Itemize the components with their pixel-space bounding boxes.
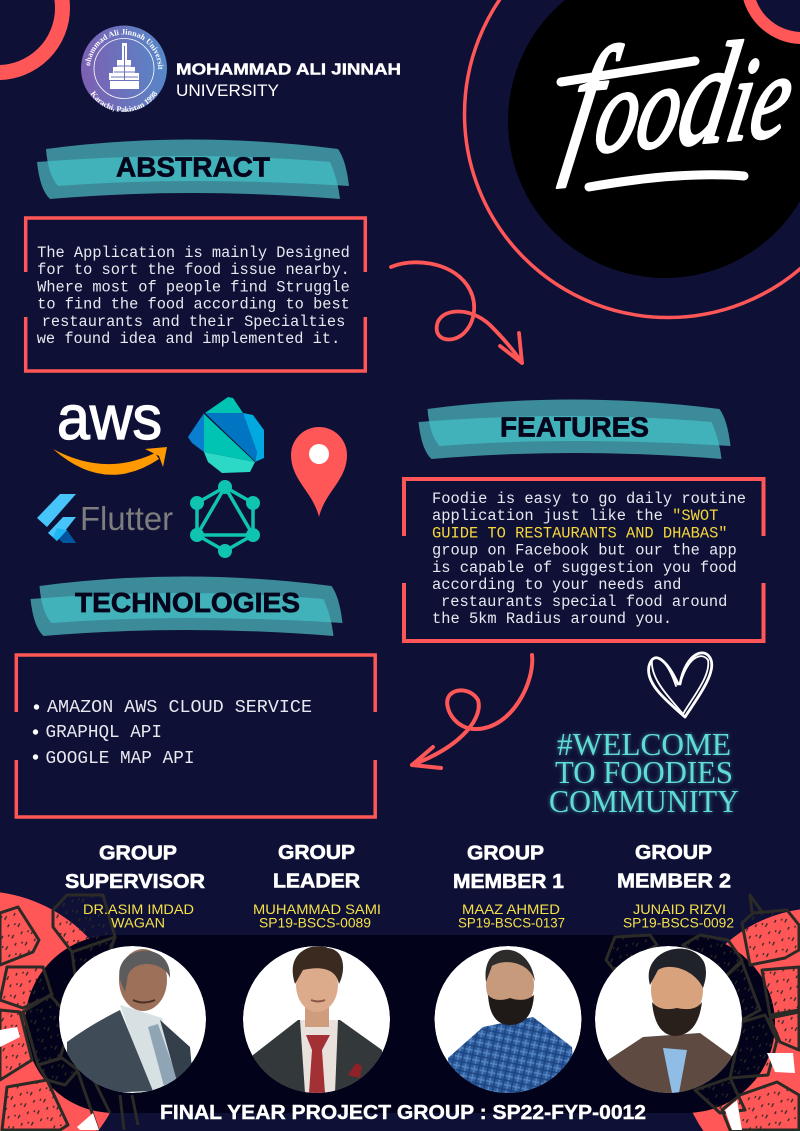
group member 1 heading and name: MEMBER 1	[453, 871, 564, 893]
panel: technologies: AMAZON AWS CLOUD SERVICE	[47, 698, 312, 718]
icon: map pin	[291, 427, 347, 517]
university seal: Karachi, Pakistan 1998	[90, 90, 158, 112]
group supervisor heading and name: DR.ASIM IMDAD	[83, 902, 194, 917]
panel: abstract: we found idea and implemented it.	[37, 330, 340, 348]
heading: features	[418, 400, 730, 459]
logo: flutter	[37, 494, 173, 543]
arrow: abstract to features	[391, 262, 522, 363]
decorative ring: top left	[0, 0, 62, 72]
group member 1 heading and name: SP19-BSCS-0137	[458, 916, 565, 930]
group member 2 heading and name: GROUP	[635, 842, 712, 864]
panel: features: application just like the "SWOT	[432, 507, 718, 525]
footer: project group: FINAL YEAR PROJECT GROUP : SP22-FYP-0012	[160, 1102, 646, 1124]
arrow: features to technologies	[412, 655, 532, 768]
panel: features: Foodie is easy to go daily routine	[432, 490, 746, 508]
slogan: welcome to foodies community: TO FOODIES	[555, 754, 733, 790]
team background: red circles and black band	[0, 892, 800, 1131]
group member 2 heading and name	[617, 842, 734, 930]
panel: abstract: Where most of people find Struggle	[37, 278, 350, 296]
illustration: right kebab skewer	[606, 895, 799, 1130]
panel: abstract: restaurants and their Specialties	[42, 313, 345, 331]
panel: abstract: for to sort the food issue nearby.	[37, 261, 350, 279]
group member 2 heading and name: SP19-BSCS-0092	[623, 916, 734, 930]
slogan: welcome to foodies community	[549, 726, 739, 819]
logo: aws: aws	[57, 384, 162, 453]
panel: abstract: The Application is mainly Designed	[37, 244, 350, 262]
group supervisor heading and name: GROUP	[99, 842, 177, 864]
panel: features: is capable of suggestion you food	[432, 559, 737, 577]
university name: MOHAMMAD ALI JINNAH	[176, 62, 401, 78]
photo: group member 1	[434, 946, 582, 1093]
logo: Foodie on black circle	[464, 0, 800, 318]
group leader heading and name	[253, 842, 381, 930]
group supervisor heading and name	[65, 842, 206, 930]
panel: features: according to your needs and	[432, 576, 681, 594]
group leader heading and name: SP19-BSCS-0089	[259, 916, 371, 930]
panel: features: group on Facebook but our the app	[432, 542, 737, 560]
group member 1 heading and name: GROUP	[467, 842, 544, 864]
group supervisor heading and name: WAGAN	[111, 916, 165, 930]
group leader heading and name: MUHAMMAD SAMI	[253, 902, 381, 917]
group member 1 heading and name	[453, 842, 565, 930]
panel: technologies: GOOGLE MAP API	[46, 749, 194, 769]
photo: group supervisor	[59, 946, 206, 1093]
heading: technologies	[30, 576, 342, 636]
heading: abstract: ABSTRACT	[116, 152, 270, 182]
icon: heart	[649, 653, 712, 717]
group member 2 heading and name: JUNAID RIZVI	[633, 902, 726, 917]
panel: features: GUIDE TO RESTAURANTS AND DHABAS"	[432, 524, 728, 542]
group supervisor heading and name: SUPERVISOR	[65, 871, 206, 893]
slogan: welcome to foodies community: COMMUNITY	[549, 783, 739, 819]
panel: features	[404, 479, 764, 641]
heading: features: FEATURES	[500, 412, 649, 442]
panel: features: restaurants special food around	[441, 593, 727, 611]
logo: flutter: Flutter	[80, 500, 173, 537]
logo: graphql	[190, 480, 260, 558]
panel: abstract: to find the food according to best	[37, 296, 350, 314]
group leader heading and name: GROUP	[278, 842, 355, 864]
illustration: left kebab skewer	[0, 895, 138, 1130]
heading: abstract	[37, 140, 349, 199]
group leader heading and name: LEADER	[273, 870, 361, 892]
heading: technologies: TECHNOLOGIES	[75, 587, 300, 618]
panel: abstract	[26, 218, 365, 371]
panel: technologies	[16, 655, 375, 817]
logo: dart	[188, 397, 264, 473]
university name: UNIVERSITY	[176, 82, 279, 100]
panel: technologies: GRAPHQL API	[46, 723, 162, 743]
university name	[176, 62, 401, 100]
group member 1 heading and name: MAAZ AHMED	[462, 902, 560, 917]
slogan: welcome to foodies community: #WELCOME	[557, 726, 731, 762]
panel: features: the 5km Radius around you.	[432, 610, 672, 628]
university seal	[81, 26, 167, 112]
photo: group leader	[243, 946, 390, 1093]
group member 2 heading and name: MEMBER 2	[617, 870, 731, 892]
photo: group member 2	[595, 946, 742, 1093]
